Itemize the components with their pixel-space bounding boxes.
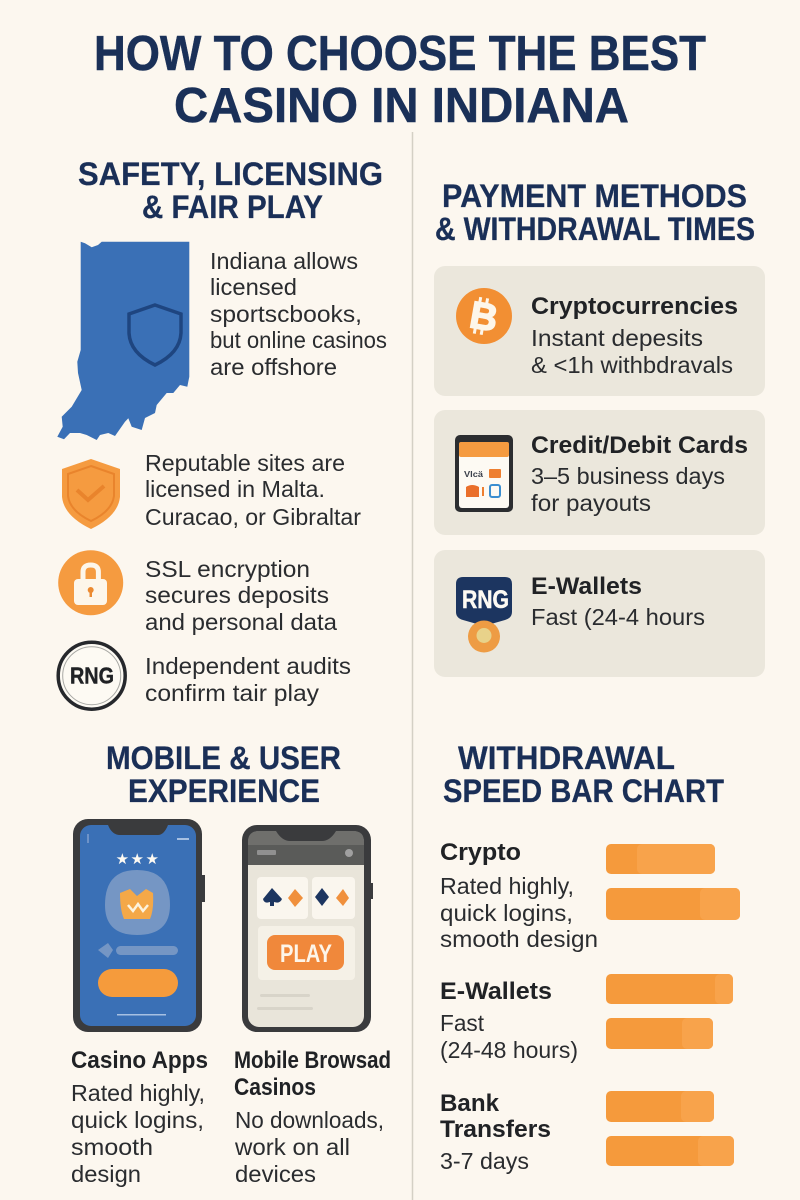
panel: payment methods <box>434 178 765 677</box>
text: encryption: secures deposits <box>145 582 329 608</box>
heading: mobile: MOBILE & USER <box>106 740 341 776</box>
icon: RNG badge <box>456 577 512 652</box>
card: credit and debit cards: 3–5 business days <box>531 463 725 489</box>
card: cryptocurrencies: & <1h withbdravals <box>531 352 733 378</box>
text: bank transfers <box>440 1090 551 1174</box>
card: cryptocurrencies: Cryptocurrencies <box>531 293 738 320</box>
bars: e-wallets <box>606 974 733 1049</box>
text: casino apps <box>71 1047 208 1187</box>
text: licensing: licensed in Malta. <box>145 476 325 502</box>
text: e-wallets: E-Wallets <box>440 978 552 1005</box>
icon: mobile browser phone: PLAY <box>280 940 332 968</box>
panel: withdrawal speed bar chart <box>440 740 740 1174</box>
text: Indiana law: are offshore <box>210 354 337 380</box>
card: e-wallets <box>434 550 765 677</box>
icon: card: Vlcä <box>464 470 484 479</box>
text: Indiana law <box>210 248 387 380</box>
icon: casino app phone <box>73 819 205 1032</box>
icon: card <box>455 435 513 512</box>
icon: RNG badge: RNG <box>462 586 509 614</box>
icon: bitcoin: B <box>467 294 501 341</box>
text: e-wallets: Fast <box>440 1010 484 1036</box>
heading: bar chart <box>443 740 724 809</box>
text: bank transfers: Bank <box>440 1090 500 1117</box>
heading: safety: SAFETY, LICENSING <box>78 156 383 192</box>
icon: orange shield check <box>62 459 120 529</box>
heading: bar chart: WITHDRAWAL <box>458 740 675 776</box>
text: casino apps: smooth <box>71 1134 153 1160</box>
text: crypto: Rated highly, <box>440 873 574 899</box>
card: credit and debit cards <box>434 410 765 535</box>
text: Indiana law: sportscbooks, <box>210 301 362 327</box>
panel: safety, licensing and fair play <box>57 156 387 709</box>
heading: safety <box>78 156 383 225</box>
text: e-wallets: (24-48 hours) <box>440 1037 578 1063</box>
heading: payment methods <box>435 178 755 247</box>
text: casino apps: quick logins, <box>71 1107 204 1133</box>
text: Indiana law: licensed <box>210 274 297 300</box>
heading: safety: & FAIR PLAY <box>142 189 323 225</box>
icon: casino app phone: ★★★ <box>116 850 160 868</box>
icon: mobile browser phone <box>242 825 373 1032</box>
panel: mobile and user experience <box>71 740 391 1187</box>
text: crypto: quick logins, <box>440 900 573 926</box>
card: e-wallets: Fast (24-4 hours <box>531 604 705 630</box>
text: licensing <box>145 450 361 530</box>
heading: bar chart: SPEED BAR CHART <box>443 773 724 809</box>
text: encryption: and personal data <box>145 609 338 635</box>
heading: mobile: EXPERIENCE <box>128 773 320 809</box>
text: bank transfers: Transfers <box>440 1116 551 1143</box>
card: cryptocurrencies: Instant depesits <box>531 325 703 351</box>
text: encryption <box>145 556 338 635</box>
heading: payment methods: PAYMENT METHODS <box>442 178 747 214</box>
text: bank transfers: 3-7 days <box>440 1148 529 1174</box>
card: credit and debit cards: for payouts <box>531 490 651 516</box>
text: crypto <box>440 839 598 952</box>
text: encryption: SSL encryption <box>145 556 310 582</box>
text: licensing: Curacao, or Gibraltar <box>145 504 361 530</box>
text: casino apps: Rated highly, <box>71 1080 205 1106</box>
text: Indiana law: Indiana allows <box>210 248 358 274</box>
text: crypto: smooth design <box>440 926 598 952</box>
icon: RNG seal: RNG <box>70 662 114 688</box>
text: Indiana law: but online casinos <box>210 327 387 353</box>
heading: payment methods: & WITHDRAWAL TIMES <box>435 211 755 247</box>
card: credit and debit cards: Credit/Debit Cards <box>531 432 748 459</box>
text: mobile browser casinos: No downloads, <box>235 1107 384 1133</box>
text: casino apps: design <box>71 1161 141 1187</box>
title: HOW TO CHOOSE THE BEST <box>94 27 706 81</box>
title: CASINO IN INDIANA <box>174 79 629 133</box>
heading: mobile <box>106 740 341 809</box>
bars: crypto <box>606 844 740 920</box>
bars: bank transfers <box>606 1091 734 1166</box>
card: e-wallets: E-Wallets <box>531 573 642 600</box>
text: mobile browser casinos <box>234 1047 391 1187</box>
text: audits <box>145 653 351 706</box>
text: crypto: Crypto <box>440 839 521 866</box>
title <box>94 27 706 133</box>
text: licensing: Reputable sites are <box>145 450 345 476</box>
icon: RNG seal <box>58 642 125 709</box>
text: mobile browser casinos: Mobile Browsad <box>234 1047 391 1074</box>
text: mobile browser casinos: work on all <box>234 1134 350 1160</box>
icon: bitcoin <box>456 288 512 344</box>
text: e-wallets <box>440 978 578 1063</box>
icon: Indiana map with shield <box>57 242 189 440</box>
icon: padlock <box>58 550 123 615</box>
text: mobile browser casinos: Casinos <box>234 1074 316 1101</box>
text: audits: confirm tair play <box>145 680 319 706</box>
text: mobile browser casinos: devices <box>235 1161 316 1187</box>
text: audits: Independent audits <box>145 653 351 679</box>
card: cryptocurrencies <box>434 266 765 396</box>
text: casino apps: Casino Apps <box>71 1047 208 1074</box>
